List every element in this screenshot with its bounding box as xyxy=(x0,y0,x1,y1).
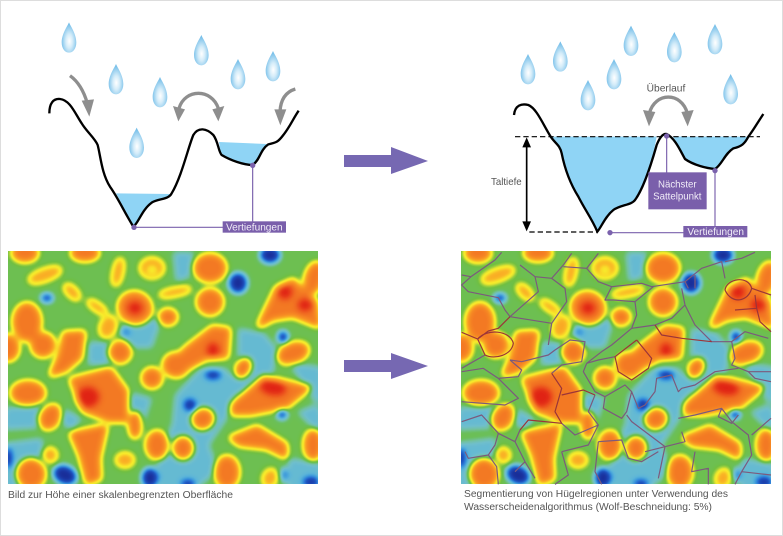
caption: right image: Wasserscheidenalgorithmus (Wolf-Beschneidung: 5%) xyxy=(464,502,712,513)
arrow: top transition xyxy=(344,147,428,174)
label: Vertiefungen: Vertiefungen xyxy=(226,222,283,233)
caption: right image: Segmentierung von Hügelregionen unter Verwendung des xyxy=(464,489,728,500)
label: Vertiefungen: Vertiefungen xyxy=(687,227,744,238)
arrow: valley depth xyxy=(522,137,531,231)
icon: water drops xyxy=(521,24,738,110)
connector lines to depression label xyxy=(131,163,255,230)
panel: rainfall on terrain before flooding xyxy=(49,22,299,233)
arrow: run-off right slope xyxy=(274,89,295,125)
arrow: run-off left slope xyxy=(70,76,94,117)
watershed segmentation lines xyxy=(462,252,771,484)
heat map: surface height image xyxy=(8,251,318,484)
terrain profile line xyxy=(514,104,763,232)
arrow: bottom transition xyxy=(344,353,428,379)
label: Nächster Sattelpunkt: Sattelpunkt xyxy=(653,191,702,202)
terrain profile line xyxy=(49,99,299,227)
saddle point marker and connector xyxy=(664,133,669,173)
caption: left image: Bild zur Höhe einer skalenbegrenzten Oberfläche xyxy=(8,490,233,501)
icon: water drops xyxy=(62,22,280,158)
water in right depression xyxy=(219,142,267,165)
water in left depression xyxy=(116,193,172,227)
label: Taltiefe: Taltiefe xyxy=(491,177,522,188)
panel: flooded terrain after filling xyxy=(491,24,763,238)
label: Nächster Sattelpunkt xyxy=(648,172,707,209)
label: Überlauf: Überlauf xyxy=(647,83,686,94)
connector lines to depression label xyxy=(607,168,718,235)
arrow: overflow both ways xyxy=(643,97,694,126)
arrow: overflow both ways xyxy=(173,93,224,121)
dashed water level lines xyxy=(515,137,760,232)
water filling right basin xyxy=(673,137,748,169)
label: Nächster Sattelpunkt: Nächster xyxy=(658,180,697,191)
water filling left basin xyxy=(551,137,657,232)
heat map: segmented hill regions xyxy=(461,251,772,485)
caption: right image xyxy=(464,489,728,513)
